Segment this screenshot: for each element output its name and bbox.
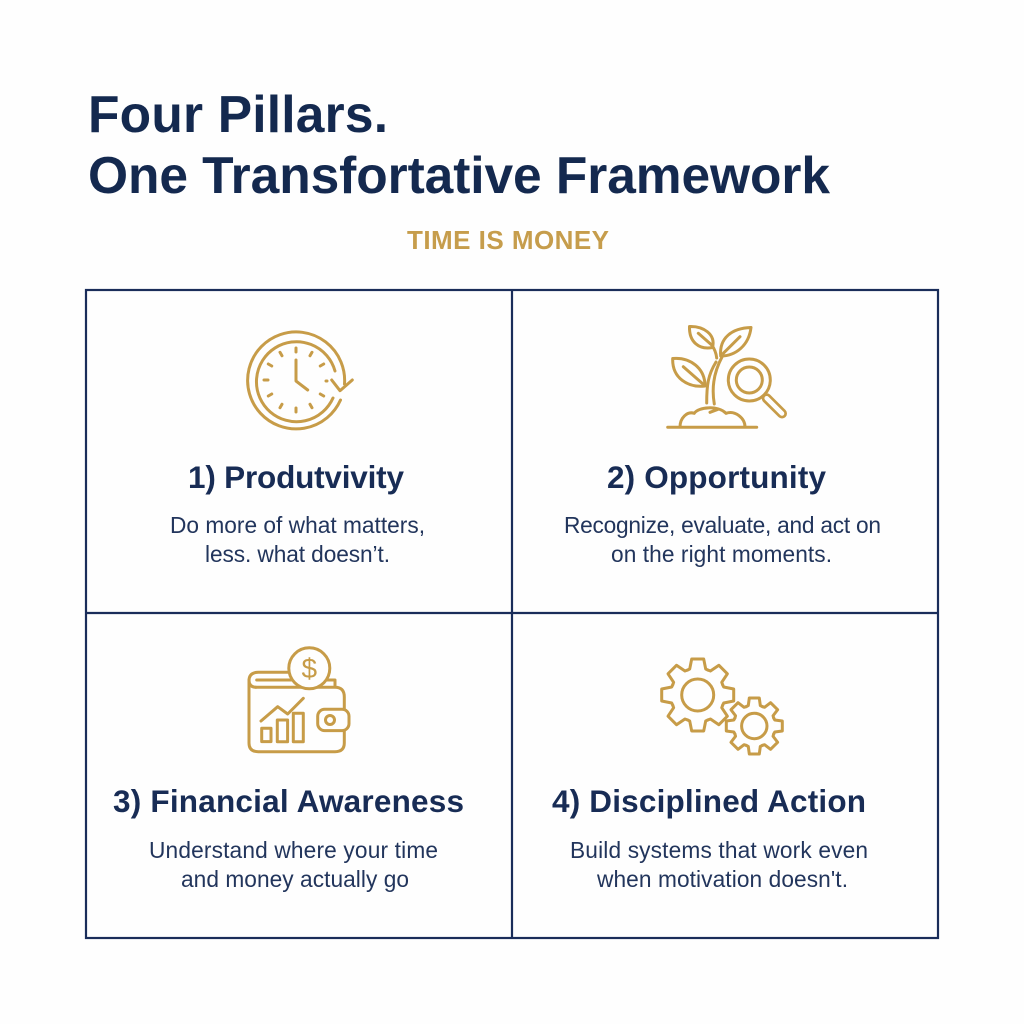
- text: opportunity description: on the right moments.: [611, 541, 832, 567]
- icon: wallet with coin and chart: [249, 648, 349, 752]
- text: disciplined action description: [570, 837, 868, 892]
- title: [88, 85, 830, 204]
- text: productivity description: Do more of what matters,: [170, 512, 425, 538]
- heading: productivity: 1) Produtvivity: [188, 459, 404, 495]
- heading: financial awareness: 3) Financial Awareness: [113, 783, 464, 819]
- panel: productivity: [170, 332, 425, 567]
- text: financial awareness description: [149, 837, 438, 892]
- icon: gears: [662, 659, 782, 754]
- heading: disciplined action: 4) Disciplined Action: [552, 783, 866, 819]
- icon: clock with arrow: [248, 332, 352, 429]
- text: opportunity description: Recognize, evaluate, and act on: [564, 512, 881, 538]
- panel: opportunity: [564, 326, 881, 567]
- text: productivity description: [170, 512, 425, 567]
- text: productivity description: less. what doesn’t.: [205, 541, 390, 567]
- title: Four Pillars.: [88, 85, 388, 143]
- text: disciplined action description: Build systems that work even: [570, 837, 868, 863]
- title: One Transfortative Framework: [88, 146, 830, 204]
- panel: disciplined action: [552, 659, 868, 892]
- text: disciplined action description: when motivation doesn't.: [596, 866, 848, 892]
- panel grid: [86, 290, 938, 938]
- text: opportunity description: [564, 512, 881, 567]
- panel: financial awareness: [113, 648, 464, 892]
- icon: wallet with coin and chart: $: [302, 653, 318, 684]
- text: financial awareness description: Understand where your time: [149, 837, 438, 863]
- heading: opportunity: 2) Opportunity: [607, 459, 826, 495]
- icon: plant and magnifier: [668, 326, 782, 427]
- text: financial awareness description: and money actually go: [181, 866, 409, 892]
- subtitle: TIME IS MONEY: [407, 225, 609, 255]
